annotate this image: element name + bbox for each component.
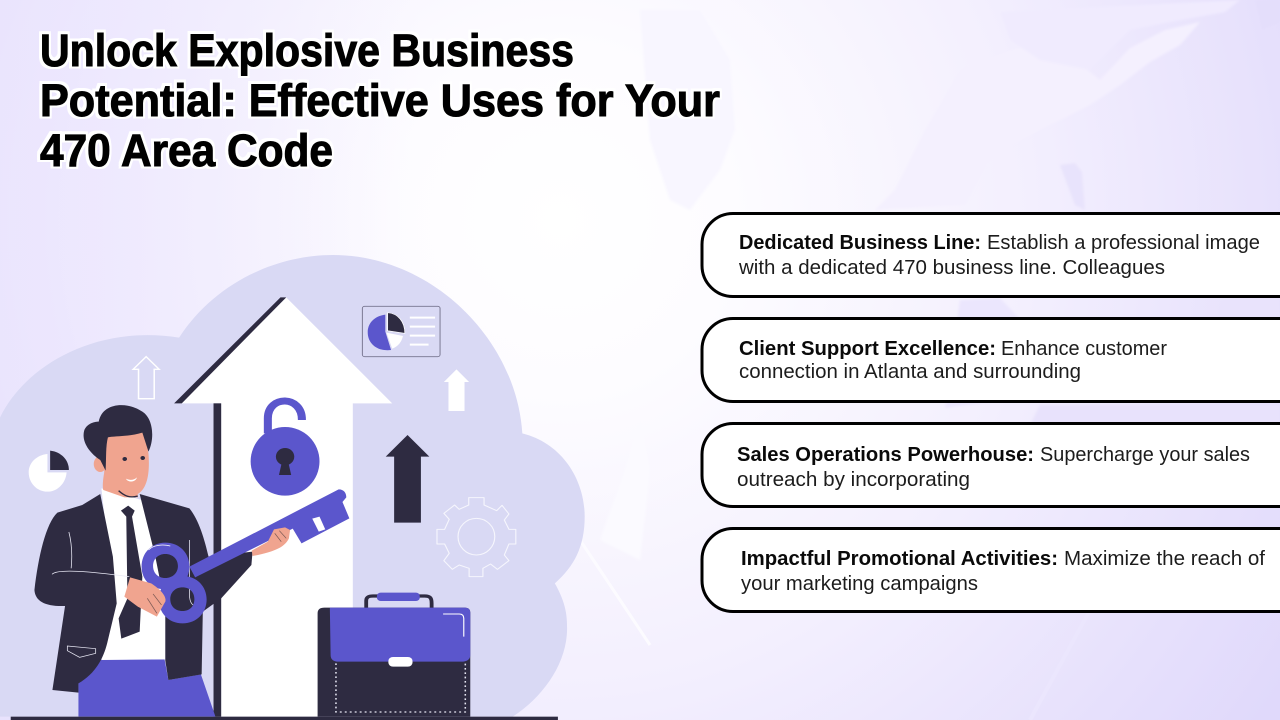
floor line (11, 717, 558, 720)
card: impactful promotional activities: Maximize the reach of (1064, 548, 1265, 570)
large up arrow (174, 297, 392, 717)
hands (124, 527, 290, 617)
card: sales operations powerhouse: Supercharge your sales (1040, 444, 1250, 466)
card: dedicated business line: Establish a professional image (987, 232, 1260, 254)
icon: white small arrow (444, 369, 469, 411)
card: dedicated business line: with a dedicated 470 business line. Colleagues (738, 257, 1165, 279)
card: client support excellence: Enhance customer (1001, 338, 1167, 360)
trousers (78, 659, 215, 717)
card: dedicated business line: Dedicated Business Line: (739, 232, 981, 254)
card: client support excellence: connection in Atlanta and surrounding (739, 361, 1081, 383)
icon: padlock (251, 401, 320, 496)
hair (84, 405, 152, 471)
card: client support excellence (702, 318, 1280, 402)
icon: gear (437, 498, 516, 577)
cloud backdrop (0, 255, 585, 717)
icon: briefcase (318, 593, 470, 717)
figure: businessman (34, 405, 349, 717)
card: impactful promotional activities: Impactful Promotional Activities: (741, 548, 1058, 570)
jacket left (34, 494, 117, 693)
icon: pie chart (29, 451, 69, 492)
icon: outlined small arrow (133, 357, 159, 399)
jacket right (140, 494, 253, 680)
title: Potential: Effective Uses for Your (40, 75, 720, 126)
card: impactful promotional activities (702, 528, 1280, 612)
icon: chart card (362, 306, 440, 357)
card: impactful promotional activities: your marketing campaigns (741, 573, 978, 595)
card: sales operations powerhouse: Sales Operations Powerhouse: (737, 444, 1034, 466)
neck and face (103, 430, 149, 497)
shirt (101, 488, 165, 660)
title: Unlock Explosive Business (40, 25, 574, 76)
jacket details (52, 532, 193, 657)
key (142, 489, 349, 623)
illustration: businessman unlocking growth (0, 255, 585, 720)
card: dedicated business line (702, 214, 1280, 296)
card: client support excellence: Client Support Excellence: (739, 338, 996, 360)
title (40, 25, 720, 176)
title: 470 Area Code (40, 125, 333, 176)
card: sales operations powerhouse: outreach by incorporating (737, 469, 970, 491)
card: sales operations powerhouse (702, 424, 1280, 506)
tie (119, 506, 142, 639)
icon: dark arrow (386, 435, 429, 523)
